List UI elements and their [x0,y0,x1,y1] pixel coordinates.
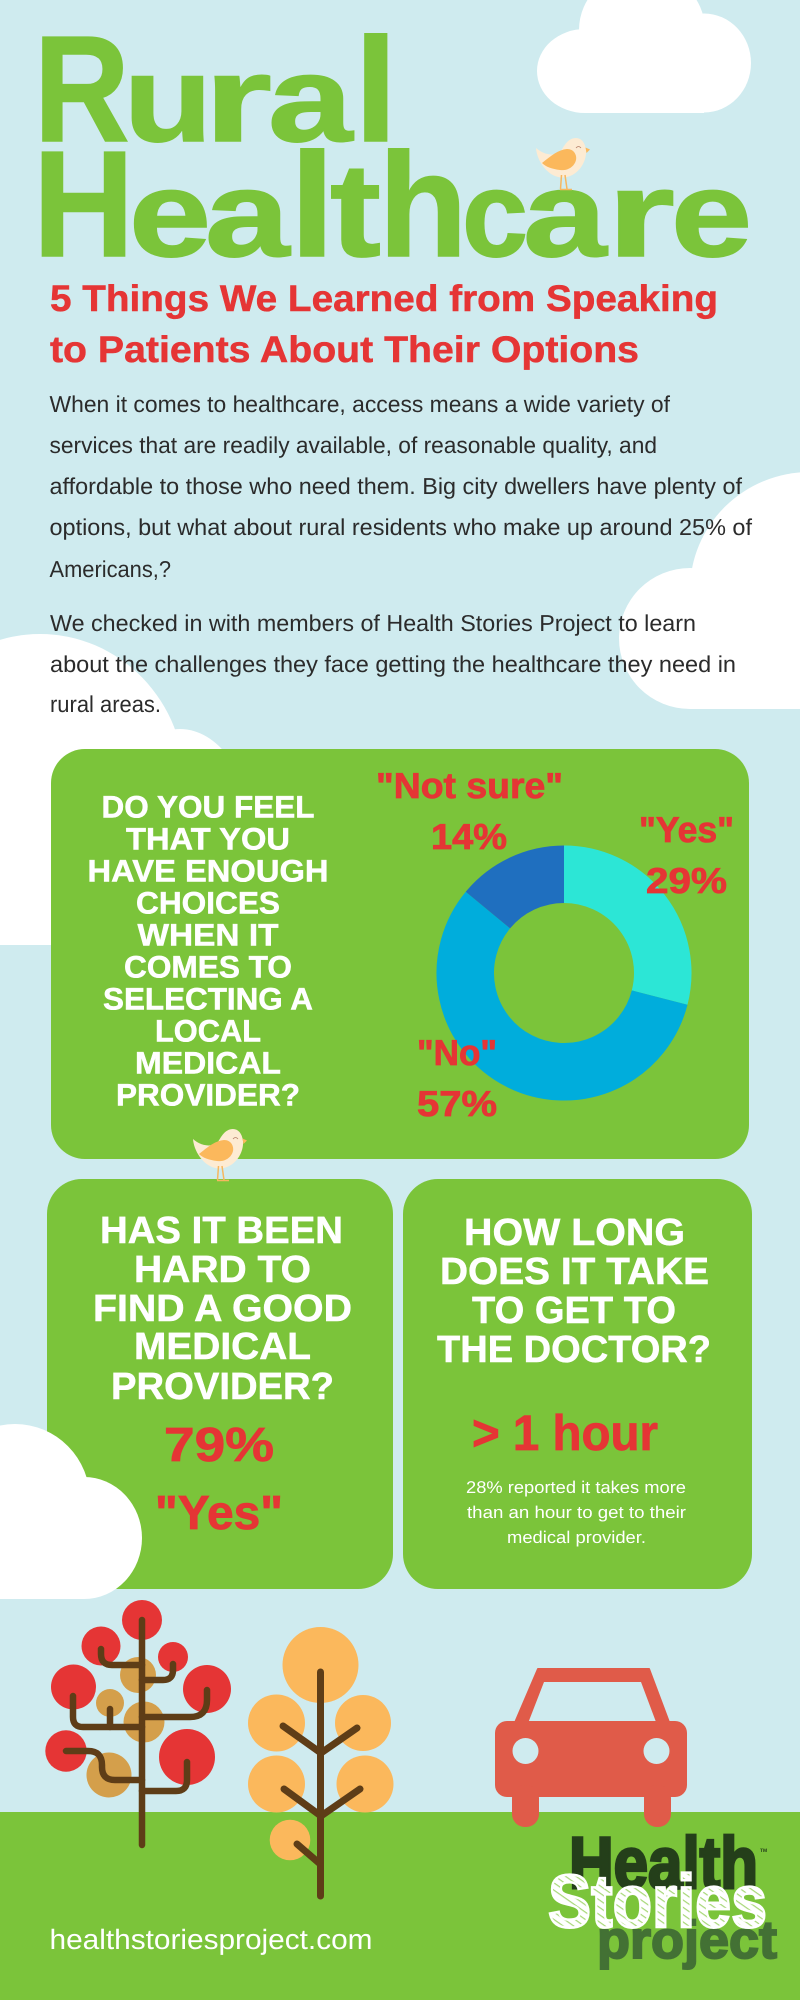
title: c [462,146,528,282]
title: a [523,146,608,282]
donut chart [465,874,663,1072]
icon: bird on panel [193,1129,247,1180]
second paragraph: about the challenges they face getting the healthcare they need in [50,651,736,677]
panel: choices survey [51,749,749,1159]
chart label: yes: 29% [646,860,727,901]
subtitle: to Patients About Their Options [50,329,639,370]
second paragraph: rural areas. [50,691,161,717]
heading: choices question [88,790,328,1112]
title: a [205,146,291,282]
chart label: yes: "Yes" [639,809,734,850]
cloud: left middle [0,634,250,945]
title [33,4,752,288]
heading: choices question: SELECTING A [103,982,313,1016]
stat description: than an hour to get to their [467,1503,686,1522]
heading: choices question: LOCAL [155,1014,261,1048]
heading: choices question: COMES TO [124,950,292,984]
title: l [290,123,335,288]
intro paragraph [50,391,753,582]
chart label: not sure: 14% [431,816,507,857]
heading: choices question: HAVE ENOUGH [88,854,328,888]
title: R [34,4,130,173]
logo: Health Stories Project [548,1823,777,1970]
heading: travel question: THE DOCTOR? [437,1329,711,1371]
second paragraph: We checked in with members of Health Stories Project to learn [50,610,696,636]
title: t [330,137,381,285]
heading: choices question: WHEN IT [138,918,279,952]
cloud: right middle [619,472,800,709]
title: a [268,31,354,167]
title: e [671,146,752,282]
heading: travel question: HOW LONG [464,1212,685,1254]
intro paragraph: When it comes to healthcare, access means a wide variety of [50,391,671,417]
ground [0,1812,800,2000]
icon: bird on title [536,138,590,190]
chart label: yes [639,809,734,901]
subtitle: 5 Things We Learned from Speaking [50,278,718,319]
heading: choices question: CHOICES [136,886,280,920]
icon: orange tree [248,1627,394,1896]
subtitle [50,278,718,370]
stat: 79 percent yes [155,1419,283,1540]
title: h [378,123,467,288]
icon: red tree [45,1600,231,1845]
title: u [124,31,212,167]
cloud: top right [537,0,751,113]
logo: Health Stories Project: Health [569,1823,758,1904]
title: e [129,146,211,282]
title: r [607,146,675,282]
intro paragraph: services that are readily available, of reasonable quality, and [50,432,657,458]
stat: 79 percent yes: "Yes" [155,1487,283,1540]
intro paragraph: Americans,? [50,556,171,582]
logo: Health Stories Project: project [597,1911,777,1970]
heading: travel question: TO GET TO [472,1290,676,1332]
chart label: no: "No" [417,1032,497,1073]
stat: 79 percent yes: 79% [164,1419,274,1472]
chart label: no [417,1032,497,1124]
title: r [204,31,272,167]
title: l [354,8,398,173]
website url: healthstoriesproject.com [50,1924,372,1955]
cloud: bottom left [0,1424,142,1599]
chart label: not sure: "Not sure" [376,765,563,806]
heading: choices question: PROVIDER? [116,1078,300,1112]
logo: Health Stories Project: TM [760,1848,767,1854]
stat description: medical provider. [507,1528,646,1547]
heading: travel question: DOES IT TAKE [440,1251,709,1293]
stat description: 28% reported it takes more [466,1478,686,1497]
stat: more than one hour: > 1 hour [472,1405,658,1461]
stat description [466,1478,686,1547]
heading: choices question: THAT YOU [126,822,290,856]
intro paragraph: options, but what about rural residents who make up around 25% of [50,514,753,540]
intro paragraph: affordable to those who need them. Big city dwellers have plenty of [50,473,743,499]
heading: provider question: MEDICAL [134,1326,311,1368]
heading: choices question: MEDICAL [135,1046,281,1080]
second paragraph [50,610,736,717]
chart label: not sure [376,765,563,857]
heading: provider question [93,1210,352,1408]
logo: Health Stories Project: Stories [548,1859,767,1943]
heading: choices question: DO YOU FEEL [102,790,314,824]
panel: travel time [403,1179,752,1589]
chart label: no: 57% [417,1083,497,1124]
title: H [33,119,134,288]
heading: provider question: HARD TO [134,1249,311,1291]
heading: provider question: HAS IT BEEN [100,1210,343,1252]
icon: car [495,1669,687,1827]
heading: provider question: FIND A GOOD [93,1288,352,1330]
heading: provider question: PROVIDER? [111,1366,334,1408]
panel: finding a provider [47,1179,393,1589]
heading: travel question [437,1212,711,1371]
